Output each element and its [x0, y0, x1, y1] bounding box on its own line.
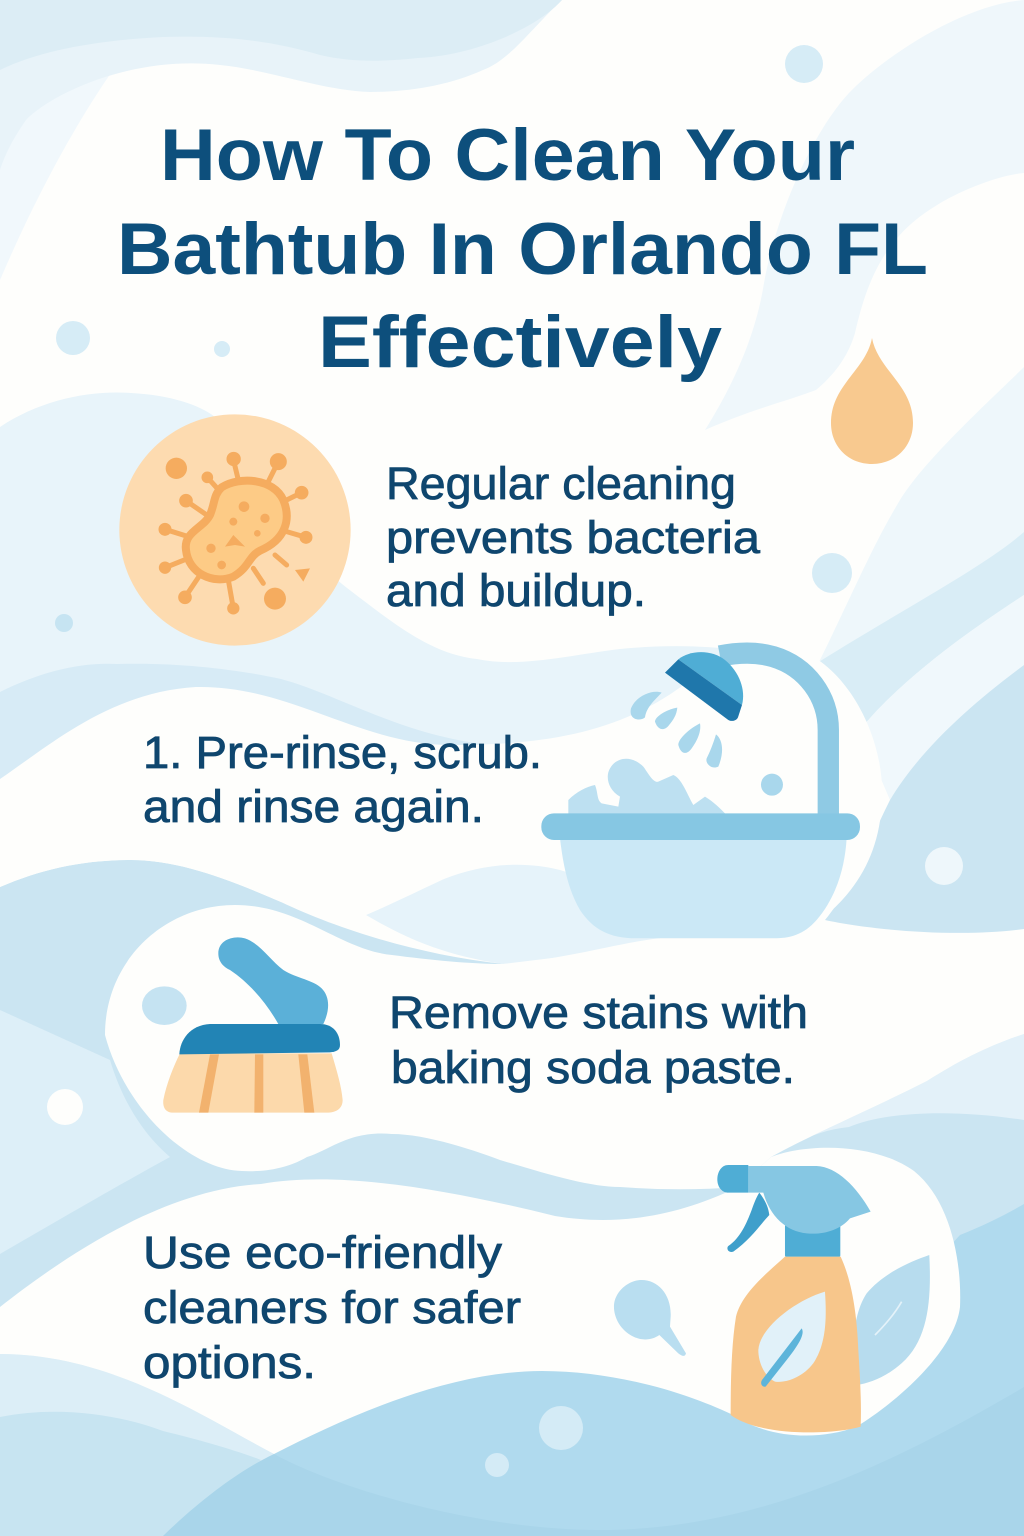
title: Effectively [318, 302, 722, 383]
text: eco-friendly [143, 1227, 521, 1388]
foam [568, 759, 727, 815]
text: pre-rinse: and rinse again. [143, 781, 484, 832]
label leaf [758, 1292, 826, 1382]
shower head [678, 652, 743, 705]
text: regular cleaning: Regular cleaning [386, 458, 736, 509]
title: Bathtub In Orlando FL [117, 209, 928, 290]
bottle body [731, 1257, 861, 1432]
text: eco-friendly: Use eco-friendly [143, 1227, 503, 1278]
bubble [142, 986, 187, 1025]
tub basin [560, 838, 847, 938]
water drops [631, 692, 783, 796]
text: remove stains: Remove stains with [389, 987, 808, 1038]
text: pre-rinse [143, 727, 542, 832]
text: eco-friendly: options. [143, 1337, 316, 1388]
handle [218, 937, 328, 1024]
title: How To Clean Your [160, 115, 855, 196]
icon: bacteria [119, 414, 351, 646]
brush back [179, 1024, 340, 1054]
text: pre-rinse: 1. Pre-rinse, scrub. [143, 727, 542, 778]
text: regular cleaning: prevents bacteria [386, 512, 761, 563]
icon: bathtub with shower [541, 652, 860, 938]
background leaf [853, 1255, 930, 1385]
water drop [614, 1280, 686, 1356]
icon: scrub brush [142, 937, 343, 1113]
neck [785, 1225, 840, 1257]
tub rim [541, 813, 860, 840]
shower pipe [720, 653, 828, 817]
text: remove stains: baking soda paste. [391, 1042, 795, 1093]
icon: spray bottle [614, 1165, 930, 1432]
text: remove stains [389, 987, 808, 1093]
icon: orange water drop [831, 338, 913, 464]
title [117, 115, 928, 383]
spray head [748, 1166, 871, 1234]
text: regular cleaning [386, 458, 761, 616]
trigger [727, 1193, 769, 1252]
bristles [163, 1053, 343, 1113]
text: regular cleaning: and buildup. [386, 565, 646, 616]
text: eco-friendly: cleaners for safer [143, 1282, 521, 1333]
